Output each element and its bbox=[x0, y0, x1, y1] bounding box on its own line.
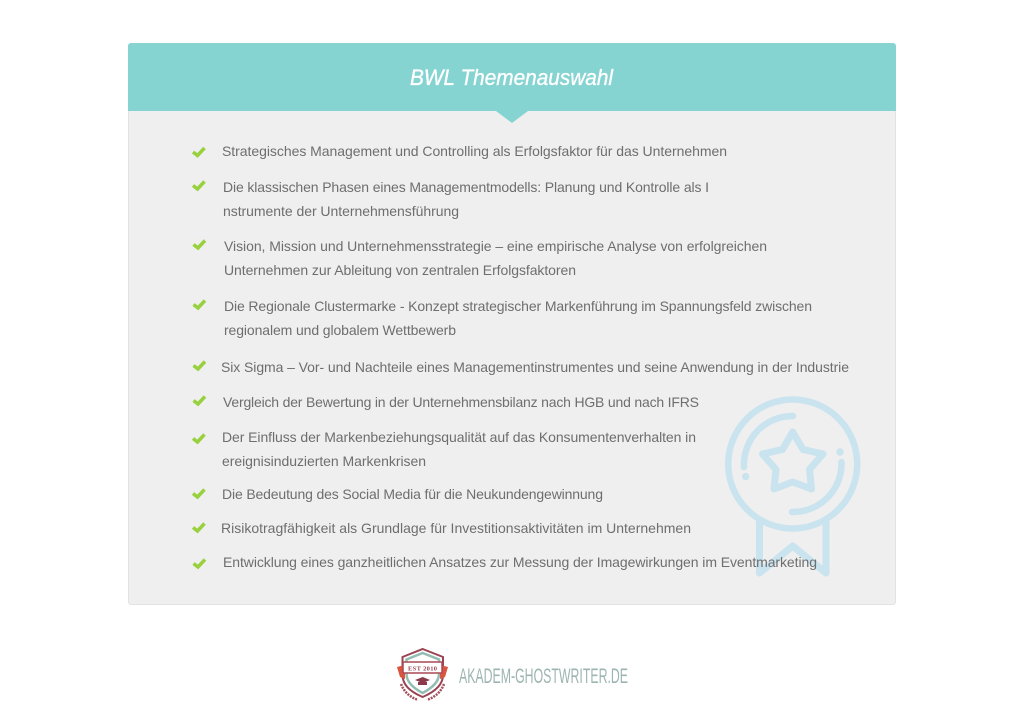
panel: topic list bbox=[128, 43, 896, 604]
list item 2: nstrumente der Unternehmensführung bbox=[223, 203, 459, 219]
list item 2: Die klassischen Phasen eines Managementmodells: Planung und Kontrolle als I bbox=[223, 179, 709, 195]
list item 3 bbox=[194, 238, 767, 278]
header band bbox=[128, 43, 896, 123]
title: BWL Themenauswahl bbox=[410, 65, 614, 90]
list item 7: ereignisinduzierten Markenkrisen bbox=[222, 453, 426, 469]
list item 4 bbox=[194, 298, 812, 338]
logo: shield emblem bbox=[397, 649, 448, 700]
list item 10: Entwicklung eines ganzheitlichen Ansatzes zur Messung der Imagewirkungen im Eventmarketing bbox=[223, 554, 817, 570]
list item 5: Six Sigma – Vor- und Nachteile eines Managementinstrumentes und seine Anwendung in der Industrie bbox=[221, 359, 849, 375]
list item 3: Unternehmen zur Ableitung von zentralen Erfolgsfaktoren bbox=[224, 262, 576, 278]
list item 1: Strategisches Management und Controlling als Erfolgsfaktor für das Unternehmen bbox=[222, 143, 727, 159]
list item 7 bbox=[193, 429, 696, 469]
list item 2 bbox=[193, 179, 709, 219]
list item 8: Die Bedeutung des Social Media für die Neukundengewinnung bbox=[222, 486, 603, 502]
list item 4: Die Regionale Clustermarke - Konzept strategischer Markenführung im Spannungsfeld zwischen bbox=[224, 298, 812, 314]
logo badge text: EST 2010 bbox=[408, 666, 437, 672]
list item 6: Vergleich der Bewertung in der Unternehmensbilanz nach HGB und nach IFRS bbox=[223, 394, 699, 410]
icon: medal watermark bbox=[728, 400, 857, 573]
list item 3: Vision, Mission und Unternehmensstrategie – eine empirische Analyse von erfolgreichen bbox=[224, 238, 767, 254]
logo wordmark: AKADEM-GHOSTWRITER.DE bbox=[459, 665, 628, 688]
list item 4: regionalem und globalem Wettbewerb bbox=[224, 322, 456, 338]
list item 9: Risikotragfähigkeit als Grundlage für Investitionsaktivitäten im Unternehmen bbox=[221, 520, 691, 536]
list item 7: Der Einfluss der Markenbeziehungsqualität auf das Konsumentenverhalten in bbox=[222, 429, 696, 445]
